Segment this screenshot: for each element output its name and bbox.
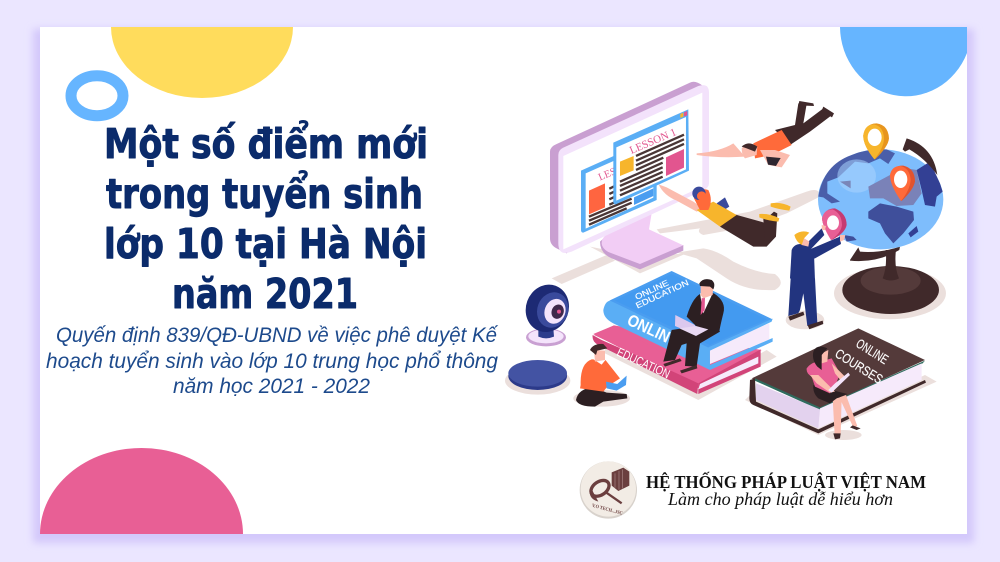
- globe: [818, 149, 943, 249]
- logo text: [646, 472, 926, 509]
- pink book: EDUCATION: [615, 345, 672, 381]
- pink book: [593, 325, 762, 394]
- dark book: ONLINE: [853, 336, 891, 367]
- illustration: computer monitor with lessons: [550, 82, 820, 290]
- blue book: ONLINE: [633, 277, 671, 302]
- back lesson window: [581, 137, 657, 233]
- character: reading boy: [573, 344, 630, 407]
- title: Một số điểm mới: [104, 120, 428, 168]
- dark book: [749, 328, 926, 433]
- logo: Hệ thống Pháp luật Việt Nam: V.O TECH...JSC: [591, 504, 623, 517]
- dark book: COURSES: [832, 346, 886, 387]
- front lesson window: [613, 109, 689, 204]
- back lesson window: LES: [597, 166, 618, 183]
- blue circle top right: [840, 27, 967, 96]
- title: năm 2021: [172, 270, 358, 318]
- illustration: globe and figures: [697, 101, 946, 329]
- character: man with blue suit: [786, 225, 845, 329]
- pink circle bottom left: [40, 448, 243, 534]
- monitor stand: [600, 213, 683, 269]
- pin: orange: [890, 166, 915, 201]
- title: lớp 10 tại Hà Nội: [104, 220, 427, 268]
- blue book: EDUCATION: [634, 277, 690, 310]
- pin: pink held by man: [822, 208, 847, 240]
- yellow circle: [111, 27, 293, 98]
- character: flying woman: [659, 184, 791, 247]
- logo text: HỆ THỐNG PHÁP LUẬT VIỆT NAM: [646, 472, 926, 492]
- globe top arm: [903, 138, 937, 175]
- title: trong tuyển sinh: [106, 170, 423, 218]
- blue book: [603, 271, 773, 370]
- pin: yellow: [863, 123, 889, 159]
- front lesson window: LESSON 1: [628, 126, 678, 157]
- logo: Hệ thống Pháp luật Việt Nam: [580, 461, 637, 519]
- character: man with laptop: [663, 279, 724, 373]
- subtitle: Quyến định 839/QĐ-UBND về việc phê duyệt Kế: [56, 324, 498, 347]
- blue ring: [71, 76, 123, 116]
- subtitle: năm học 2021 - 2022: [173, 375, 370, 398]
- blue book: ONLIN: [624, 310, 673, 347]
- illustration: books, webcam and reader: [505, 271, 777, 407]
- globe stand base: [834, 250, 946, 319]
- character: flying man: [697, 101, 834, 167]
- illustration: dark book with reading woman: [745, 328, 937, 440]
- puck: [505, 360, 570, 395]
- logo text: Làm cho pháp luật dễ hiểu hơn: [667, 489, 893, 509]
- webcam: [519, 278, 576, 346]
- monitor body: [550, 82, 709, 253]
- globe arm: [850, 247, 900, 261]
- title: [104, 120, 428, 318]
- subtitle: [46, 324, 498, 398]
- subtitle: hoạch tuyển sinh vào lớp 10 trung học phổ thông: [46, 350, 498, 373]
- character: woman with tablet: [807, 346, 862, 440]
